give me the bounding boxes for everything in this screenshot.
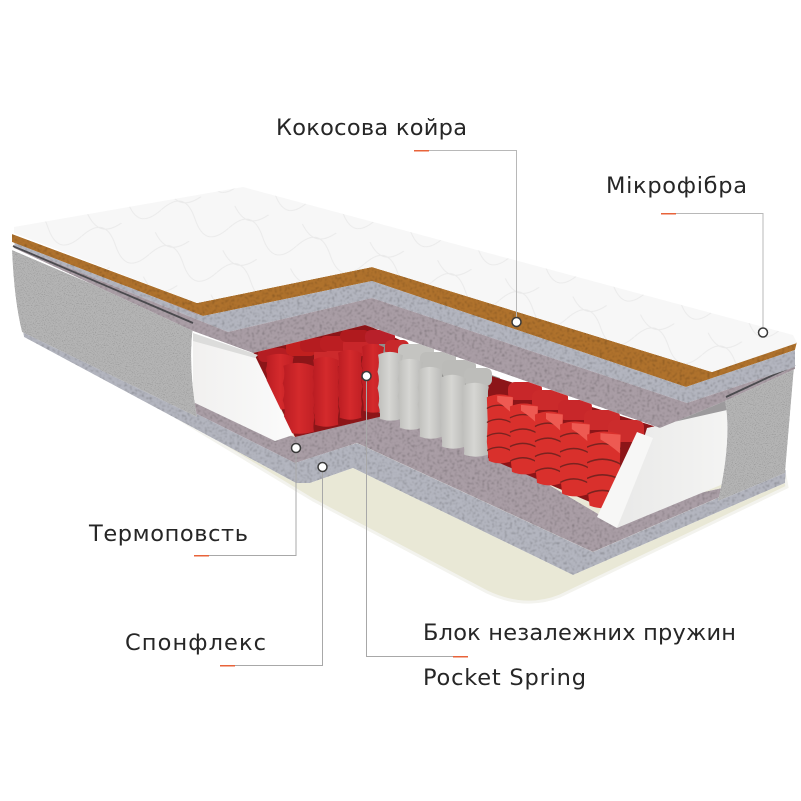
pocket springs: left red group <box>258 330 409 434</box>
label: Блок незалежних пружин / Pocket Spring <box>362 372 736 691</box>
pocket springs: right red group <box>487 382 644 508</box>
label: Спонфлекс: Спонфлекс <box>125 630 266 656</box>
label: Мікрофібра: Мікрофібра <box>606 173 747 199</box>
label: Блок незалежних пружин / Pocket Spring: Блок незалежних пружин <box>423 620 736 646</box>
label: Термоповсть <box>88 444 300 556</box>
layer: upper thermal felt <box>14 240 795 428</box>
foam block: right <box>597 398 728 528</box>
pocket springs: central white group <box>378 344 492 457</box>
layer: lower thermal felt <box>193 400 722 552</box>
label: Термоповсть: Термоповсть <box>88 521 248 547</box>
fabric side: left <box>12 250 197 417</box>
layer: lower spunflex felt <box>22 326 786 575</box>
base cream sheet <box>176 400 787 602</box>
label: Кокосова койра <box>276 115 521 326</box>
foam block: left <box>193 333 293 441</box>
label: Кокосова койра: Кокосова койра <box>276 115 467 141</box>
label: Блок незалежних пружин / Pocket Spring: Pocket Spring <box>423 665 586 691</box>
layer: coconut coir <box>12 234 797 387</box>
fabric side: right <box>718 367 794 501</box>
layer: upper spunflex felt <box>13 238 795 403</box>
layer: microfibre top <box>14 187 797 372</box>
label: Спонфлекс <box>125 462 327 666</box>
spring block: cavity backdrop <box>253 324 660 515</box>
shadow seam under upper layers <box>13 246 795 397</box>
label: Мікрофібра <box>606 173 768 337</box>
